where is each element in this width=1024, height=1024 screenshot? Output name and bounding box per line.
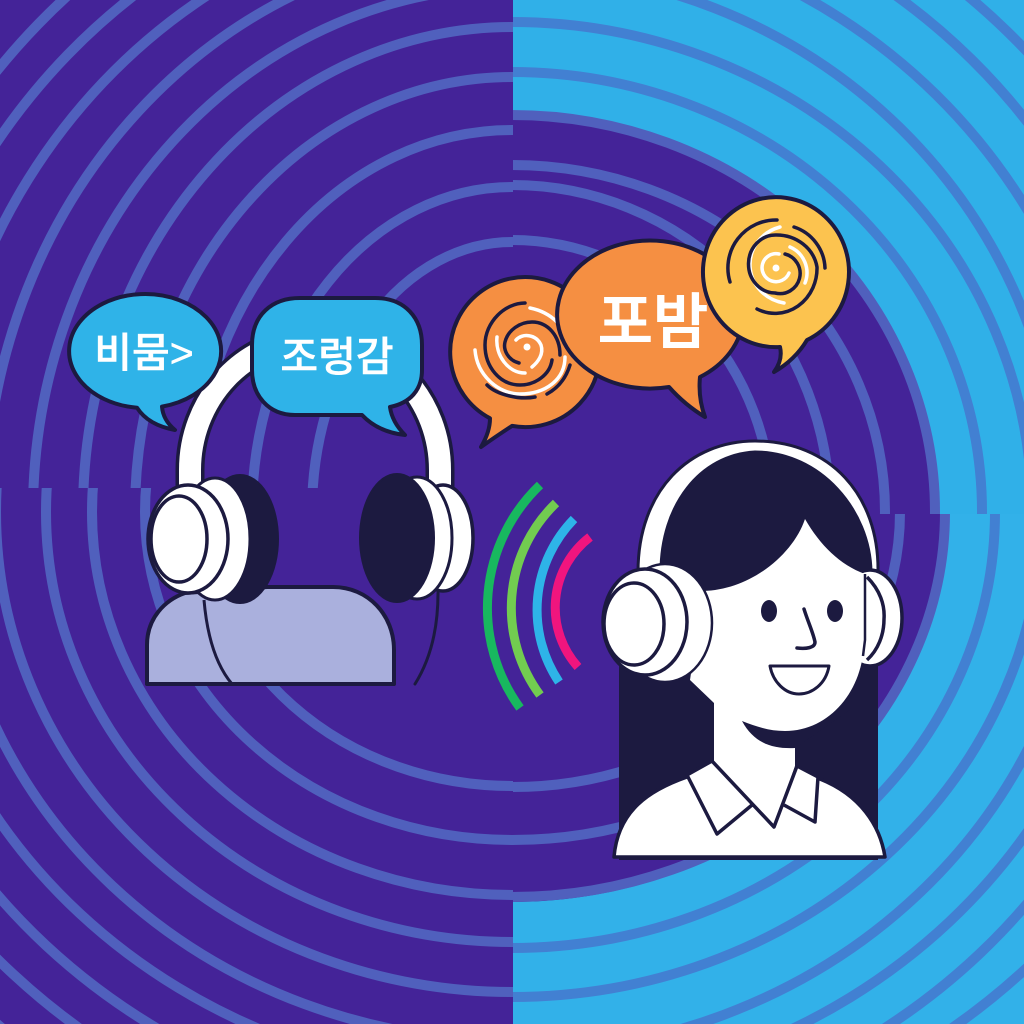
collar: left flap [687, 761, 752, 834]
speech bubble: blue right [252, 298, 422, 435]
icon: headband [638, 441, 878, 572]
speech bubble: blue left: 비뭄> [94, 330, 194, 376]
face edge line [863, 574, 865, 656]
icon: nose [797, 609, 815, 648]
cord: left headphone wire [204, 600, 232, 684]
icon: right eye [827, 600, 843, 622]
face [690, 519, 865, 731]
background: rings bottom right [513, 514, 1024, 1024]
body: lavender shoulders [147, 587, 394, 684]
speech bubble: orange with swirl [450, 277, 600, 447]
figure: smiling woman with headphones [603, 441, 902, 860]
shirt [614, 777, 885, 857]
background: blue field top right [513, 0, 1024, 514]
speech bubble: blue left [69, 294, 221, 430]
icon: right earcup [838, 570, 902, 666]
speech bubble: orange with text: 포밤 [598, 289, 708, 356]
hair: long dark hair [619, 445, 878, 860]
icon: sound waves [487, 485, 590, 708]
collar: right flap [784, 766, 818, 822]
chin shadow [742, 710, 850, 748]
background: rings bottom left [0, 488, 513, 1024]
speech bubble: yellow with swirl [703, 197, 849, 372]
speech bubble: blue right: 조렁감 [280, 334, 394, 380]
collar: V neckline [712, 761, 797, 827]
background: blue field bottom right [513, 514, 1024, 1024]
icon: left earcup [148, 475, 278, 603]
background: rings top right [513, 0, 1024, 514]
figure: listener seen from behind with headphones [147, 339, 473, 684]
speech bubble: orange with text [557, 241, 743, 417]
icon: mouth [770, 666, 829, 694]
background: rings top left [0, 0, 513, 488]
icon: right earcup [360, 474, 473, 602]
cord: right headphone wire [415, 593, 438, 684]
icon: headband [190, 339, 440, 495]
icon: left eye [761, 600, 777, 622]
icon: left earcup [603, 564, 712, 682]
neck [714, 695, 795, 827]
